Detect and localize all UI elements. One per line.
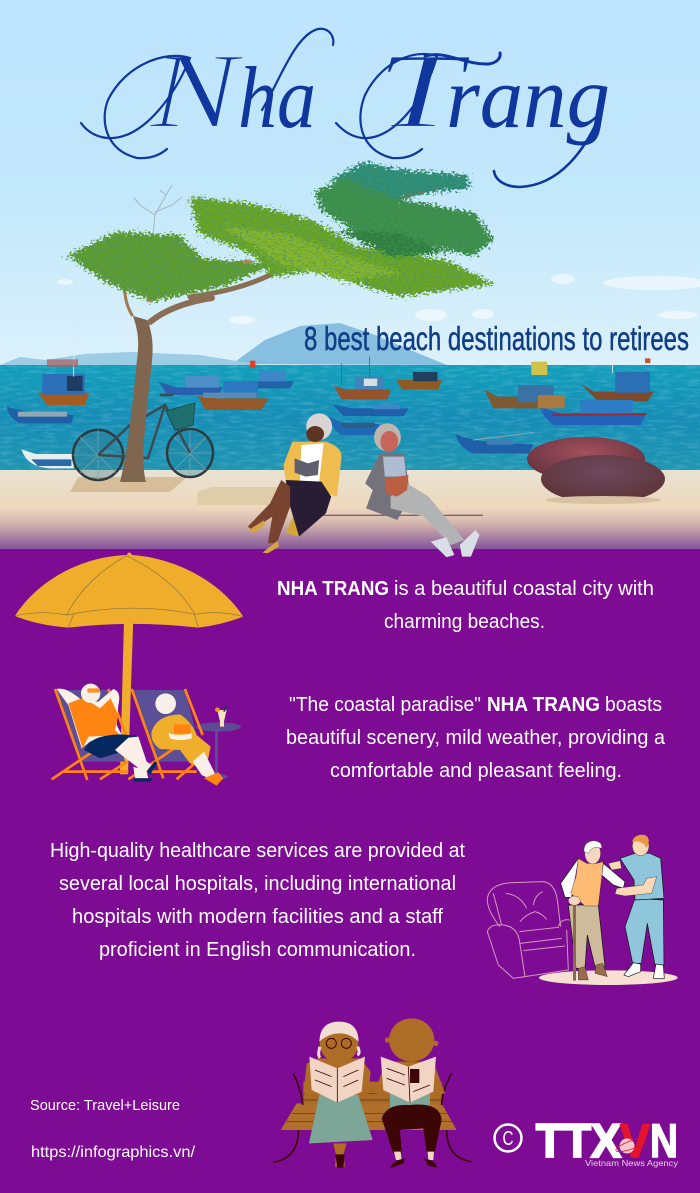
main arm leaves — [190, 197, 496, 297]
title: N — [149, 32, 245, 151]
sea — [0, 365, 700, 472]
logo: TTXVN: N — [650, 1114, 678, 1167]
bench line — [321, 514, 483, 517]
bench — [273, 1073, 472, 1162]
text: source: Source: Travel+Leisure — [30, 1097, 180, 1114]
logo: TTXVN: TTX — [536, 1114, 621, 1167]
boat 9 — [328, 417, 379, 435]
front wheel — [167, 429, 213, 477]
boat 11 — [484, 362, 563, 408]
text: coastal paradise: "The coastal paradise" — [289, 694, 481, 716]
bicycle — [73, 395, 213, 480]
woman in grey jacket — [365, 423, 479, 557]
nurse — [608, 835, 664, 978]
left crown leaves — [67, 232, 272, 302]
chair frames — [57, 690, 203, 762]
boat 12 — [538, 395, 646, 425]
fade band — [0, 507, 700, 549]
side table — [196, 705, 241, 779]
woman reading — [303, 1022, 373, 1168]
logo: TTXVN — [536, 1114, 679, 1168]
rear wheel — [73, 430, 123, 480]
text: intro: is a beautiful coastal city with — [394, 578, 654, 600]
mountains — [0, 323, 447, 365]
frame — [98, 395, 190, 458]
text: coastal paradise: comfortable and pleasant feeling. — [330, 760, 622, 782]
boat 7 — [396, 372, 442, 389]
man reading — [375, 1018, 445, 1168]
man — [57, 684, 157, 782]
tree trunk — [120, 316, 153, 482]
illustration: nurse helping elderly man — [487, 835, 678, 985]
title: rang — [446, 50, 610, 147]
boat 13 — [580, 323, 654, 402]
illustration: couple reading on bench — [273, 1018, 472, 1168]
panel: beach photo — [0, 0, 700, 557]
logo: TTXVN: V — [620, 1114, 651, 1167]
text: healthcare: proficient in English communication. — [99, 939, 416, 961]
elderly man — [561, 841, 625, 981]
coracle baskets — [527, 437, 665, 504]
boat 14 — [21, 449, 74, 468]
illustration: couple under umbrella — [15, 552, 243, 786]
boat 5 — [248, 361, 294, 388]
people reading on the wall — [248, 413, 483, 557]
title: T — [376, 32, 472, 151]
pavement — [0, 470, 700, 508]
armchair outline — [487, 882, 570, 978]
sea waves — [0, 365, 700, 472]
text: healthcare: hospitals with modern facilities and a staff — [72, 906, 443, 928]
clouds — [57, 274, 700, 324]
sky — [0, 0, 700, 366]
boat 10 — [455, 433, 533, 453]
globe — [615, 1136, 647, 1154]
woman in yellow jacket — [248, 413, 341, 553]
text: healthcare — [50, 840, 465, 961]
bare twigs — [134, 185, 182, 236]
boat 2 — [7, 407, 74, 423]
upper leaves — [315, 178, 493, 257]
basket — [166, 403, 195, 430]
tree foliage — [67, 162, 496, 302]
text: website: https://infographics.vn/ — [31, 1144, 196, 1161]
agency name: Vietnam News Agency — [585, 1158, 679, 1168]
floor ellipse — [539, 970, 678, 985]
fishing boats — [7, 323, 654, 468]
text: coastal paradise: NHA TRANG — [487, 694, 600, 716]
text: intro — [277, 578, 654, 633]
title — [81, 29, 610, 187]
title: ha — [238, 50, 316, 147]
top branch leaves — [330, 162, 469, 200]
text: healthcare: several local hospitals, including international — [59, 873, 456, 895]
boat 6 — [334, 357, 391, 399]
boat 4 — [198, 381, 269, 410]
icon: copyright: C — [502, 1128, 514, 1150]
boat 3 — [158, 376, 223, 395]
boat 8 — [333, 405, 408, 416]
icon: copyright — [494, 1124, 522, 1152]
woman — [151, 693, 223, 786]
boat 1 — [38, 323, 89, 405]
text: coastal paradise: boasts — [605, 694, 662, 716]
title swashes — [81, 29, 600, 187]
text: coastal paradise — [286, 694, 666, 782]
text: intro: NHA TRANG — [277, 578, 389, 600]
umbrella canopy — [15, 552, 243, 628]
tree branches — [112, 186, 440, 322]
text: healthcare: High-quality healthcare services are provided at — [50, 840, 465, 862]
text: intro: charming beaches. — [384, 611, 545, 633]
umbrella pole — [120, 608, 134, 774]
text: coastal paradise: beautiful scenery, mild weather, providing a — [286, 727, 666, 749]
